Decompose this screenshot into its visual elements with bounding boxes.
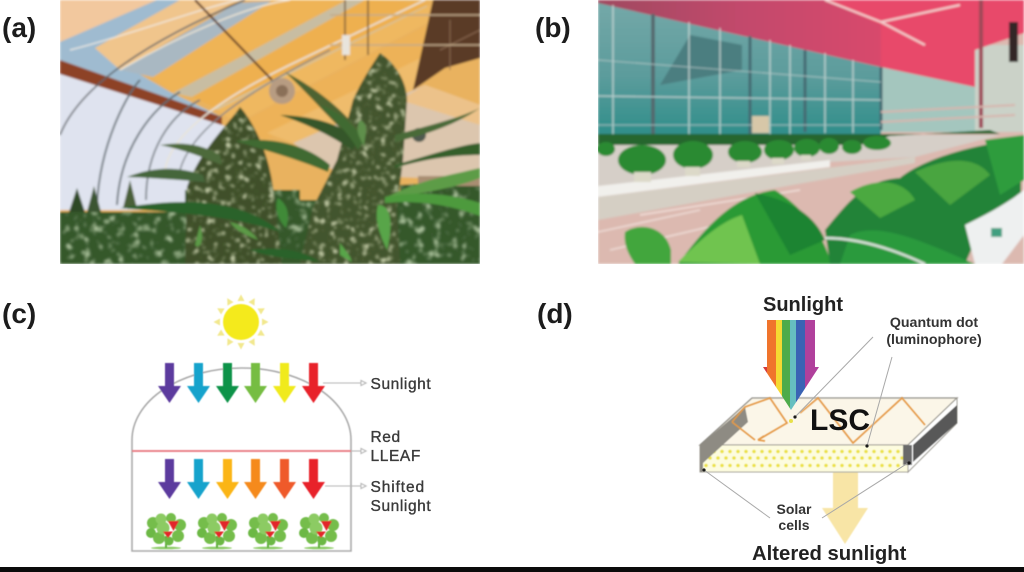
foreground canopy mass <box>60 180 480 264</box>
icon: sun <box>214 294 268 350</box>
red LLEAF film line <box>132 450 351 452</box>
icon: strawberry plants <box>146 513 339 549</box>
small distant buds <box>69 188 85 212</box>
panel d: luminescent solar concentrator diagram <box>700 318 957 544</box>
label: LSC: LSC <box>810 404 870 437</box>
label: Quantum dot (luminophore): Quantum dot <box>890 315 978 331</box>
panel a: photo of cannabis plants in a shaded hoop greenhouse <box>60 0 480 264</box>
sunlight arrows <box>158 363 325 403</box>
leader lines <box>323 380 366 488</box>
label (a): (a) <box>2 12 36 43</box>
black bottom bar <box>0 567 1024 572</box>
red film band <box>598 0 881 67</box>
dark brown upper right <box>413 0 480 90</box>
altered sunlight arrow <box>822 472 868 544</box>
white sleeve <box>965 190 1024 264</box>
label: Solar cells: Solar <box>776 501 812 517</box>
label: Quantum dot (luminophore): (luminophore) <box>886 332 982 348</box>
distant plant row <box>598 130 1000 145</box>
shifted sunlight arrows <box>158 459 325 499</box>
ceiling panels <box>60 0 157 42</box>
area behind the bed <box>598 135 1000 186</box>
right bud <box>300 53 407 264</box>
brown beam <box>60 60 222 125</box>
heading: Altered sunlight: Altered sunlight <box>752 543 907 565</box>
left bud <box>185 107 282 264</box>
label (d): (d) <box>537 298 573 329</box>
floor lines <box>598 190 800 250</box>
greenhouse outline <box>132 368 351 551</box>
label (b): (b) <box>535 12 571 43</box>
label: Red LLEAF: LLEAF <box>370 448 421 465</box>
potted plants <box>597 136 891 175</box>
glass wall <box>598 3 881 135</box>
label: Solar cells: cells <box>778 517 810 533</box>
white bags <box>598 160 830 197</box>
label: Sunlight: Sunlight <box>370 376 431 393</box>
panel c: red LLEAF greenhouse diagram <box>132 294 366 551</box>
hanging cable and fixture <box>195 0 272 80</box>
LSC slab <box>700 398 957 472</box>
label (c): (c) <box>2 298 36 329</box>
callout lines <box>704 337 908 518</box>
side wall <box>60 72 226 212</box>
callout dots <box>702 415 911 472</box>
far wall on the right <box>293 85 480 180</box>
label: Red LLEAF: Red <box>370 429 401 446</box>
rainbow sunlight arrow <box>763 320 819 410</box>
label: Shifted Sunlight: Shifted <box>370 479 425 496</box>
leaves <box>120 202 280 232</box>
red ceiling <box>825 0 1024 87</box>
heading: Sunlight: Sunlight <box>763 294 843 316</box>
right glass <box>881 67 975 132</box>
gutter <box>598 157 915 220</box>
foreground lettuce <box>625 227 671 264</box>
panel b: photo of lettuce under a red film greenhouse <box>597 0 1024 264</box>
label: Shifted Sunlight: Sunlight <box>370 498 431 515</box>
tube <box>825 238 925 264</box>
arch ribs <box>60 0 245 135</box>
frame <box>651 14 655 140</box>
orange light paths <box>732 398 925 443</box>
